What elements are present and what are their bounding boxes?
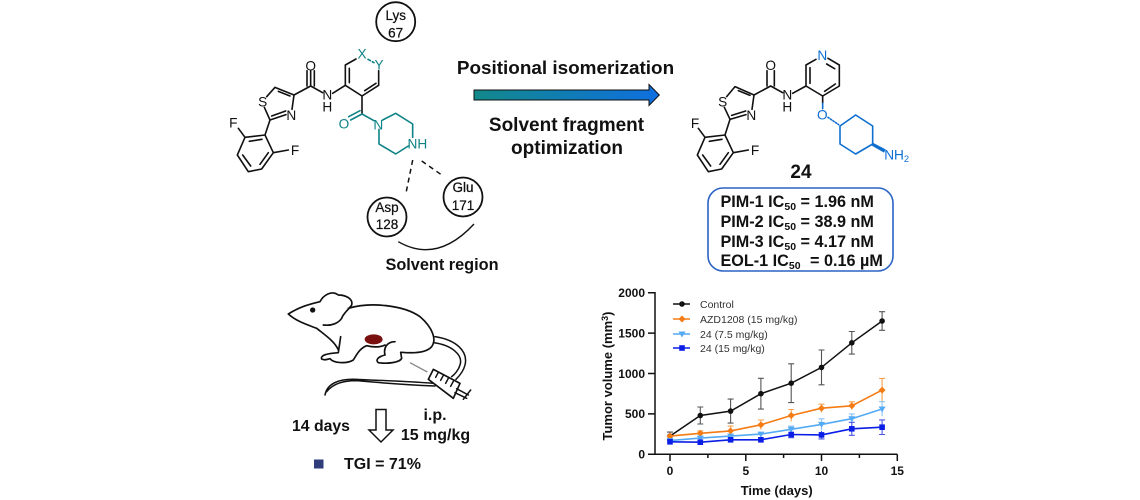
potency box: EOL-1 IC [720,252,789,270]
solvent region label: Solvent region [385,256,499,274]
residue circle: Glu 171 [444,178,482,216]
potency box: 50 [789,260,801,272]
left molecule: lead compound scaffold [229,47,427,172]
right molecule: compound 24: N [782,87,792,102]
right molecule: compound 24: F [691,116,699,131]
potency box: 50 [784,221,796,233]
right molecule: compound 24: O [765,58,776,73]
mouse illustration with tumor [288,293,466,395]
syringe icon [410,363,471,399]
reaction arrow [474,84,659,106]
dose label: i.p. [423,407,447,424]
tumor growth inhibition result: TGI = 71% [344,456,421,473]
right molecule: compound 24: 2 [904,154,909,164]
potency box [708,188,893,272]
y axis tick labels: 2000 [618,286,645,300]
series: 24 at 7.5 mg/kg [670,409,882,441]
residue circle: Lys 67: Lys [385,8,406,23]
right molecule: compound 24: H [782,100,792,115]
residue circle: Lys 67: 67 [388,26,403,40]
solvent region arc [398,224,474,250]
y axis title: 3 [600,316,610,321]
chart legend: 24 (15 mg/kg) [700,343,765,355]
right molecule: compound 24: F [751,143,759,158]
left molecule: lead compound scaffold: F [229,115,238,130]
heading: positional isomerization: Positional isomerization [457,58,674,79]
heading: solvent fragment optimization: Solvent fragment [489,115,644,136]
heading: solvent fragment optimization: optimization [511,138,623,159]
left molecule: lead compound scaffold: NH [407,137,427,152]
series: control [670,321,882,436]
potency box: PIM-3 IC [720,233,784,251]
y axis tick labels: 1000 [618,367,645,381]
series: 24 at 15 mg/kg [670,427,882,442]
error bars [667,312,885,440]
series: AZD1208 [670,390,882,436]
residue circle: Asp 128: 128 [376,217,398,232]
y axis tick labels: 500 [625,407,645,421]
line chart: tumor volume [600,286,904,498]
duration label: 14 days [292,418,350,435]
hydrogen bond to Asp 128 [406,160,413,193]
residue circle: Asp 128 [368,198,406,236]
x axis tick labels: 5 [742,464,749,478]
potency box: PIM-1 IC [720,193,784,211]
right molecule: compound 24: N [817,48,827,63]
hydrogen bond to Glu 171 [422,161,443,176]
right molecule: compound 24: O [817,107,828,122]
potency box: PIM-2 IC [720,213,784,231]
y axis tick labels [618,286,645,462]
y axis title: ) [600,311,615,316]
potency box: = 4.17 nM [796,233,874,251]
residue circle: Glu 171: Glu [452,180,474,195]
chart legend: AZD1208 (15 mg/kg) [700,314,797,326]
x axis tick labels: 15 [891,464,904,478]
residue circle: Lys 67 [376,2,415,41]
hollow downward arrow [369,410,393,442]
x axis tick labels [667,464,904,478]
potency box: = 38.9 nM [796,213,874,231]
x axis tick labels: 0 [667,464,674,478]
residue circle: Glu 171: 171 [452,198,474,213]
chart legend [673,299,797,355]
dose label: 15 mg/kg [401,427,470,444]
left molecule: lead compound scaffold: Y [374,57,384,72]
right molecule: compound 24: N [746,108,756,123]
left molecule: lead compound scaffold: O [305,59,316,74]
right molecule: compound 24: NH [884,147,904,162]
right molecule: compound 24 [691,48,909,172]
chart axes [648,293,897,461]
x axis tick labels: 10 [815,464,828,478]
left molecule: lead compound scaffold: X [357,47,367,62]
left molecule: lead compound scaffold: N [286,108,296,123]
y axis title: Tumor volume (mm [600,321,615,441]
left molecule: lead compound scaffold: N [373,117,383,132]
y axis tick labels: 0 [638,448,645,462]
left molecule: lead compound scaffold: N [322,87,332,102]
chart legend: Control [700,299,734,311]
potency box: 50 [784,201,796,213]
left molecule: lead compound scaffold: S [258,95,267,110]
left molecule: lead compound scaffold: O [339,117,349,132]
potency box: 50 [784,241,796,253]
legend square [314,460,324,468]
y axis tick labels: 1500 [618,326,645,340]
potency box: = 0.16 µM [806,252,883,270]
left molecule: lead compound scaffold: H [322,99,332,114]
compound number: 24 [790,162,812,183]
x axis title: Time (days) [741,483,813,498]
left molecule: lead compound scaffold: F [291,143,299,158]
potency box: = 1.96 nM [796,193,874,211]
right molecule: compound 24: S [718,95,727,110]
residue circle: Asp 128: Asp [375,200,399,215]
chart legend: 24 (7.5 mg/kg) [700,329,768,341]
